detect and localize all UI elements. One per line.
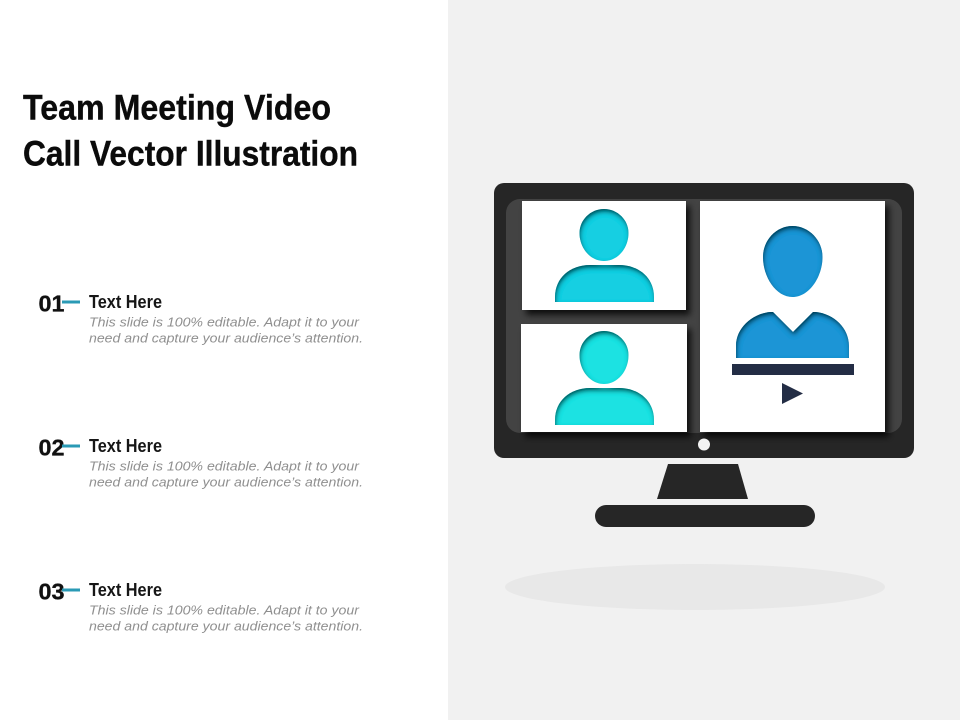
list item 01: 01 (38, 290, 64, 316)
name bar (732, 364, 854, 375)
list item 01: This slide is 100% editable. Adapt it to your (89, 314, 360, 330)
icon: person bottom left (555, 331, 654, 425)
video tile: top left (522, 201, 686, 310)
background panel: right (448, 0, 960, 720)
monitor bezel (494, 183, 914, 458)
list item 03: 03 (38, 578, 64, 604)
list item 02: 02 (38, 434, 64, 460)
list item 03 (38, 578, 363, 634)
list item 02: This slide is 100% editable. Adapt it to your (89, 458, 360, 474)
list item 03: This slide is 100% editable. Adapt it to your (89, 602, 360, 618)
floor shadow ellipse (505, 564, 885, 610)
video tile: main speaker (700, 201, 885, 432)
icon: play button (782, 383, 803, 404)
icon: person top left (555, 209, 654, 302)
list item 01 (38, 290, 363, 346)
video tile: bottom left (521, 324, 687, 432)
monitor base (595, 505, 815, 527)
monitor screen (506, 199, 902, 433)
list item 02: Text Here (89, 436, 162, 456)
list item 02: need and capture your audience’s attention. (89, 474, 363, 490)
list item 01: Text Here (89, 292, 162, 312)
monitor neck (657, 464, 748, 499)
list item 03: need and capture your audience’s attention. (89, 618, 363, 634)
list item 03: Text Here (89, 580, 162, 600)
monitor illustration (494, 183, 914, 527)
title: Team Meeting Video (23, 88, 331, 128)
power light (698, 438, 710, 450)
title: Call Vector Illustration (23, 134, 358, 174)
list item 01: need and capture your audience’s attention. (89, 330, 363, 346)
list item 02 (38, 434, 363, 490)
title (23, 88, 358, 174)
icon: main speaker person (736, 226, 849, 358)
